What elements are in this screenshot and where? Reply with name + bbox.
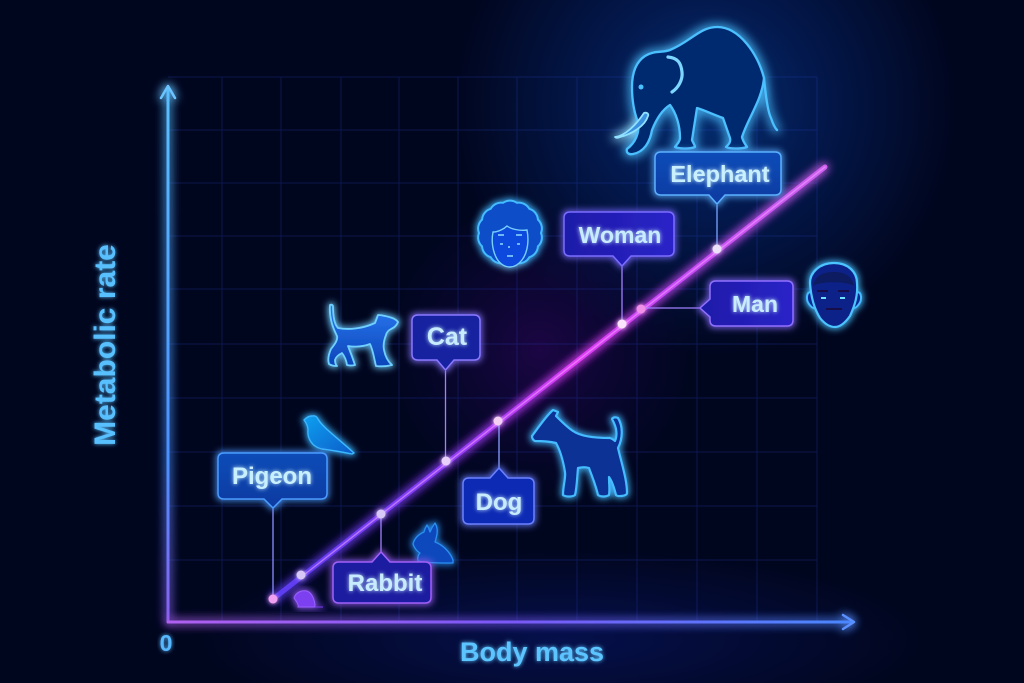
icon: dog — [532, 410, 627, 496]
icon: cat — [328, 305, 398, 366]
trend line — [273, 167, 825, 599]
callout: Cat: Cat — [427, 323, 468, 351]
callout: Rabbit: Rabbit — [348, 570, 422, 597]
callout: Man — [641, 281, 793, 326]
x axis arrow — [168, 615, 854, 629]
callout: Dog — [463, 421, 534, 524]
icon: mouse — [294, 591, 323, 607]
callout: Elephant: Elephant — [670, 161, 770, 187]
y axis arrow — [161, 86, 175, 622]
icon: man face — [807, 263, 861, 327]
axis origin zero: 0 — [160, 630, 172, 656]
callout: Dog: Dog — [476, 489, 522, 516]
icon: rabbit — [413, 523, 453, 563]
icon: pigeon — [304, 416, 354, 454]
callout: Rabbit — [333, 514, 431, 603]
icon: elephant — [615, 27, 777, 154]
icon: woman face — [478, 201, 542, 267]
data points — [268, 244, 722, 604]
callout: Pigeon — [218, 453, 327, 599]
callout: Woman: Woman — [579, 222, 661, 248]
callout: Elephant — [655, 152, 781, 249]
callout: Cat — [412, 315, 480, 461]
callout: Pigeon: Pigeon — [232, 463, 312, 490]
callout: Woman — [564, 212, 674, 324]
x axis title: Body mass — [460, 637, 604, 667]
callout: Man: Man — [732, 291, 778, 317]
y axis title: Metabolic rate — [89, 244, 122, 446]
